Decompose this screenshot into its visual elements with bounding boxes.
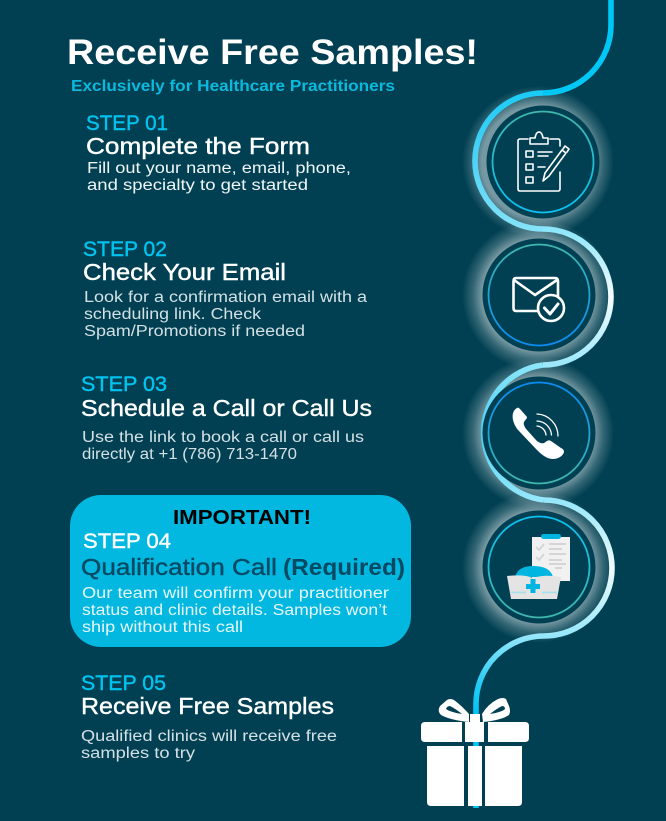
winding path line [475, 0, 612, 808]
step 04 heading: (Required) [283, 554, 405, 580]
step 01 text block [86, 112, 351, 194]
important label: IMPORTANT! [173, 507, 311, 529]
step 02 text block: Look for a confirmation email with a [84, 289, 367, 306]
title: Receive Free Samples! [67, 33, 478, 72]
step 02 text block: Check Your Email [83, 259, 286, 285]
step 05 text block: STEP 05 [81, 672, 166, 695]
step 04 heading [81, 554, 405, 580]
step 05 text block: samples to try [81, 745, 195, 762]
step 03 text block: STEP 03 [81, 373, 167, 396]
icon: gift box [421, 698, 529, 806]
step 01 text block: Fill out your name, email, phone, [87, 160, 351, 177]
step 04 description: Our team will confirm your practitioner [82, 585, 389, 602]
step 02 text block: Spam/Promotions if needed [84, 323, 305, 340]
icon: nurse cap and checklist [482, 510, 596, 624]
step 05 text block: Receive Free Samples [81, 693, 334, 719]
step 03 text block: directly at +1 (786) 713-1470 [82, 446, 297, 463]
step 05 text block [81, 672, 337, 762]
step 04 heading: Qualification Call [81, 554, 277, 580]
subtitle: Exclusively for Healthcare Practitioners [71, 78, 395, 95]
glows behind circles [462, 86, 614, 643]
step 02 text block [83, 238, 367, 340]
step 01 text block: and specialty to get started [87, 177, 308, 194]
icon: clipboard with pencil [486, 106, 600, 218]
icon: envelope with check [482, 238, 596, 352]
step 02 text block: STEP 02 [83, 238, 167, 261]
step 03 text block: Schedule a Call or Call Us [81, 395, 372, 421]
step 03 text block [81, 373, 372, 463]
step 03 text block: Use the link to book a call or call us [82, 429, 364, 446]
step 05 text block: Qualified clinics will receive free [81, 728, 337, 745]
step 04 description: ship without this call [82, 619, 243, 636]
step 04 description [82, 585, 389, 636]
step 02 text block: scheduling link. Check [84, 306, 261, 323]
gift bow [439, 698, 510, 722]
step 04 label: STEP 04 [83, 530, 171, 553]
panel: step 04 important callout [70, 495, 411, 647]
step 04 description: status and clinic details. Samples won’t [82, 602, 388, 619]
step 01 text block: STEP 01 [86, 112, 168, 135]
icon: phone with signal waves [482, 376, 596, 490]
step 01 text block: Complete the Form [86, 133, 310, 159]
